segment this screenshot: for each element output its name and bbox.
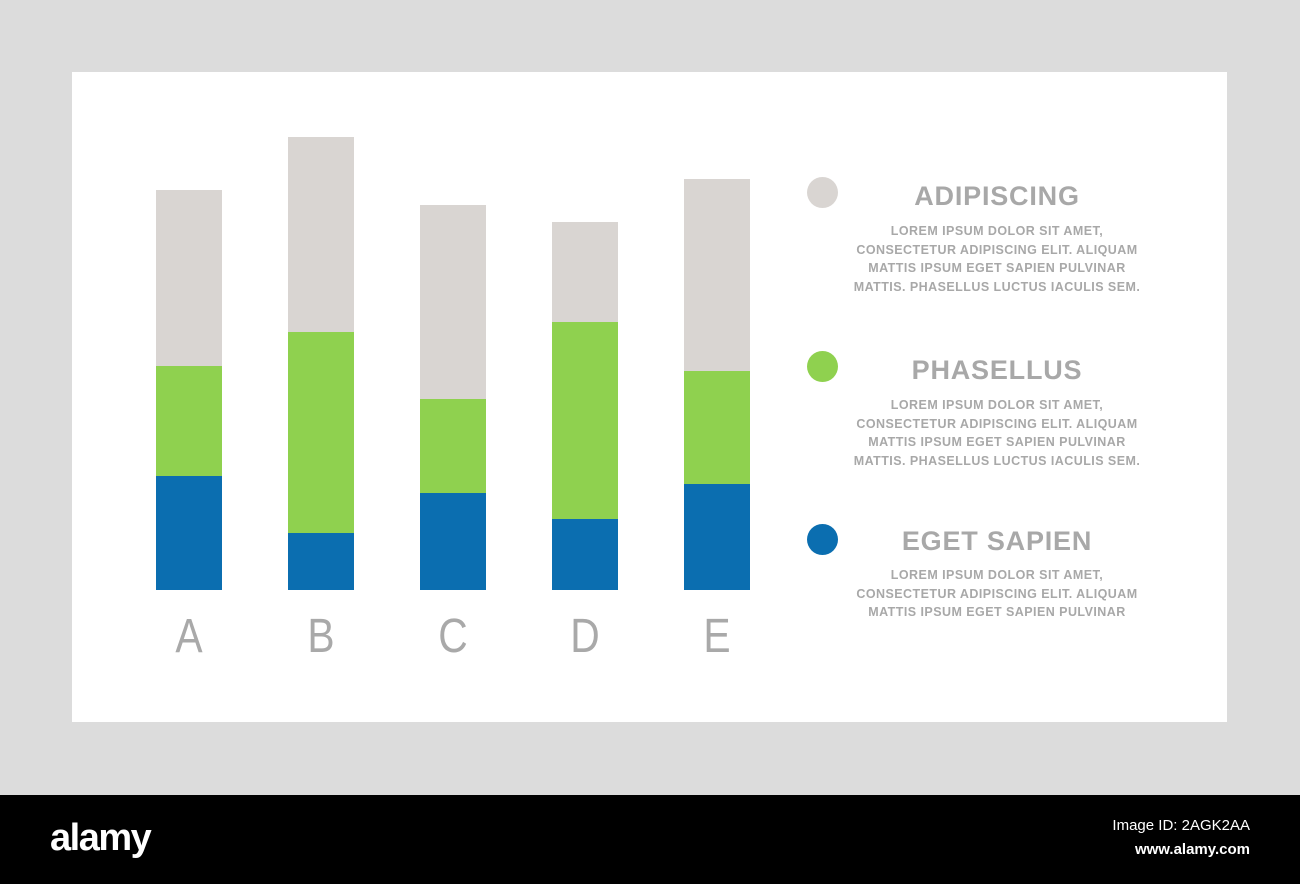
axis labels: E xyxy=(703,610,731,663)
legend: adipiscing: LOREM IPSUM DOLOR SIT AMET, xyxy=(891,224,1103,238)
legend: adipiscing: MATTIS. PHASELLUS LUCTUS IACULIS SEM. xyxy=(854,280,1140,294)
logo: alamy xyxy=(50,817,150,859)
legend: eget sapien xyxy=(807,524,1138,619)
legend: adipiscing: CONSECTETUR ADIPISCING ELIT. ALIQUAM xyxy=(856,243,1138,257)
legend: eget sapien: EGET SAPIEN xyxy=(902,526,1092,556)
legend: phasellus: CONSECTETUR ADIPISCING ELIT. ALIQUAM xyxy=(856,417,1138,431)
legend: phasellus: MATTIS IPSUM EGET SAPIEN PULVINAR xyxy=(868,435,1126,449)
bar chart xyxy=(156,137,750,663)
legend: adipiscing: MATTIS IPSUM EGET SAPIEN PULVINAR xyxy=(868,261,1126,275)
bar A xyxy=(156,190,222,590)
url: www.alamy.com xyxy=(1135,841,1250,858)
axis labels xyxy=(175,610,731,663)
legend: adipiscing xyxy=(807,177,1140,294)
legend: phasellus xyxy=(807,351,1140,468)
bar E xyxy=(684,179,750,590)
axis labels: B xyxy=(307,610,335,663)
footer band xyxy=(0,795,1300,884)
bar B xyxy=(288,137,354,590)
bar C xyxy=(420,205,486,590)
legend: phasellus: PHASELLUS xyxy=(912,355,1082,385)
legend: adipiscing: ADIPISCING xyxy=(914,181,1080,211)
bar D xyxy=(552,222,618,590)
axis labels: C xyxy=(438,610,468,663)
legend: phasellus: LOREM IPSUM DOLOR SIT AMET, xyxy=(891,398,1103,412)
axis labels: D xyxy=(570,610,600,663)
legend: eget sapien: CONSECTETUR ADIPISCING ELIT. ALIQUAM xyxy=(856,587,1138,601)
legend: eget sapien: LOREM IPSUM DOLOR SIT AMET, xyxy=(891,568,1103,582)
legend: phasellus: MATTIS. PHASELLUS LUCTUS IACULIS SEM. xyxy=(854,454,1140,468)
image id: Image ID: 2AGK2AA xyxy=(1112,817,1250,834)
axis labels: A xyxy=(175,610,203,663)
panel: chart card xyxy=(72,72,1227,722)
legend: eget sapien: MATTIS IPSUM EGET SAPIEN PULVINAR xyxy=(868,605,1126,619)
